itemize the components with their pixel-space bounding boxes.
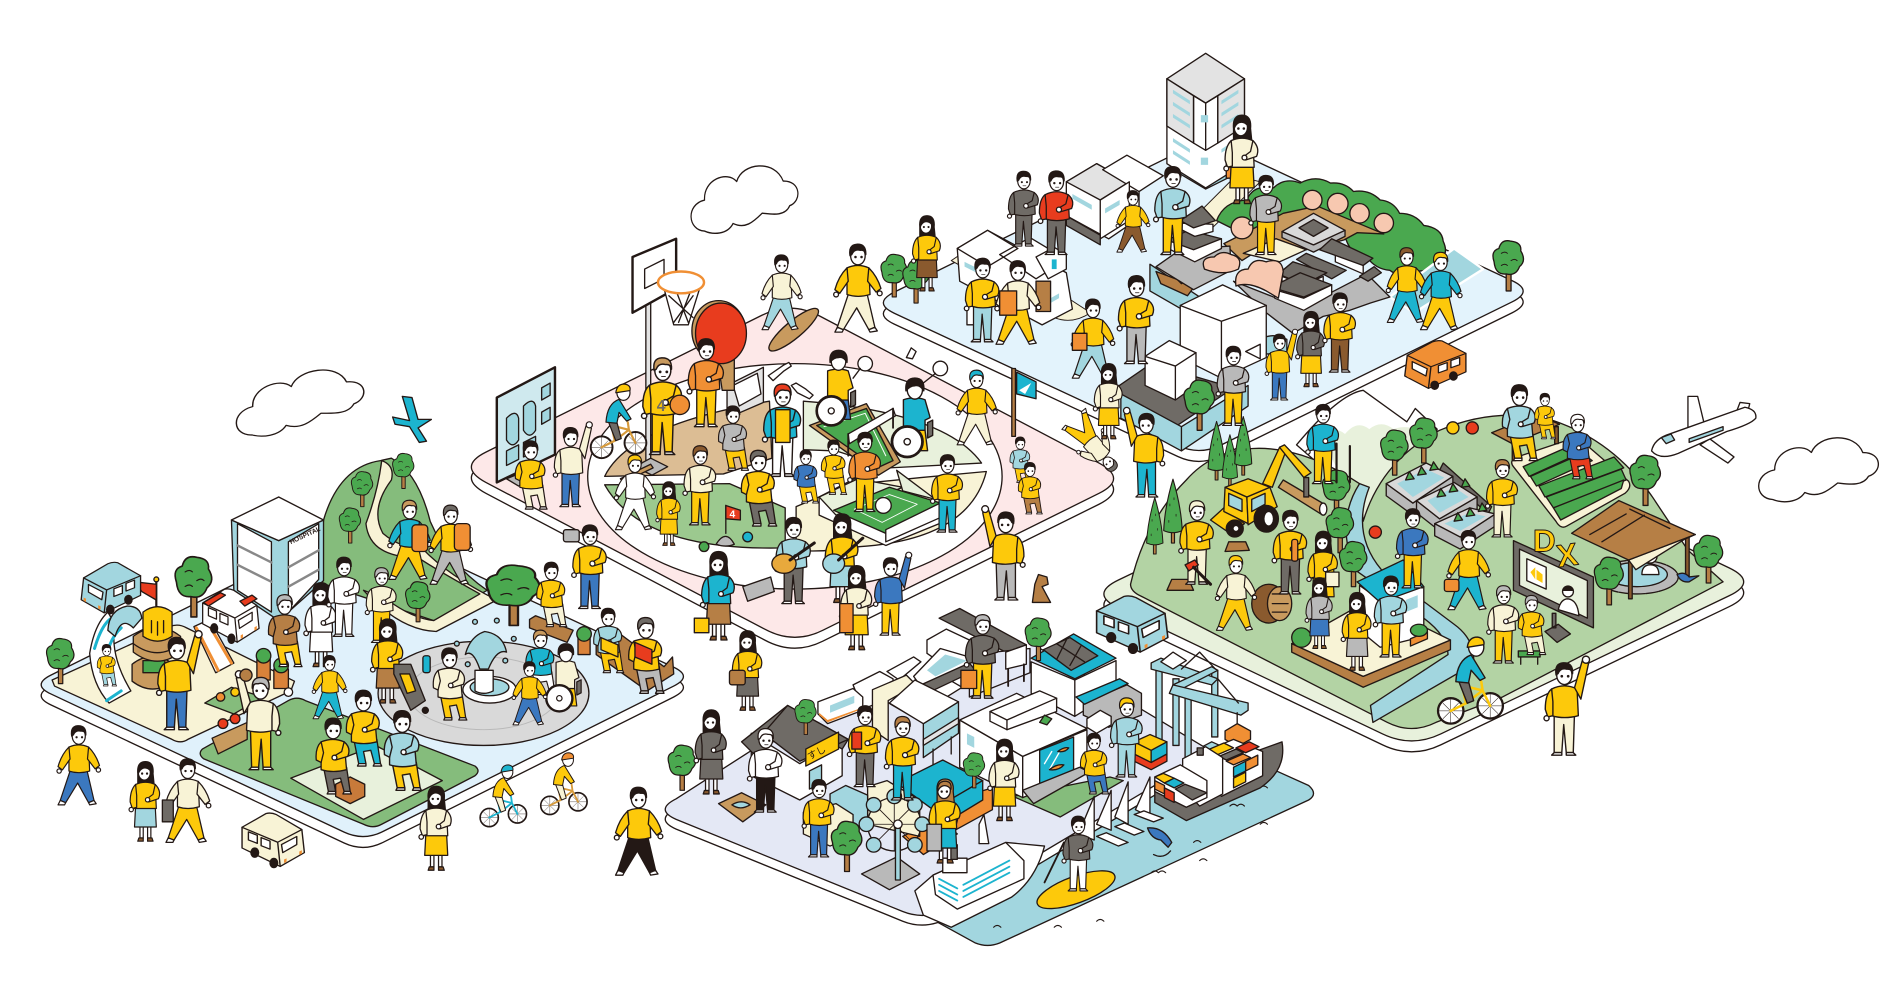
person: yellow jumper walking	[834, 244, 882, 332]
person: grandfather with glove	[235, 669, 281, 770]
teal warehouse and orange racks	[868, 760, 992, 855]
planter: right	[577, 627, 591, 655]
cloud: right	[1753, 432, 1882, 505]
people: sports and culture platform	[515, 216, 1165, 710]
stand up paddle board	[1033, 863, 1119, 916]
icon: soccer ball	[875, 498, 891, 513]
person: elderly man	[1487, 586, 1519, 663]
icon: rackets	[853, 356, 948, 383]
hot spring	[1596, 550, 1678, 594]
person: guide	[1117, 276, 1154, 364]
bench: readers	[596, 628, 674, 691]
person: reader with red book	[629, 618, 664, 693]
person: woman walking	[729, 631, 762, 710]
planters	[1386, 462, 1495, 549]
platform top: right	[1104, 435, 1744, 741]
person: kid on slide	[97, 644, 117, 686]
icon: yellow excavator	[1211, 445, 1327, 537]
icon: stroller	[394, 664, 428, 718]
waves	[994, 786, 1267, 927]
icon: wooden barrel	[1252, 584, 1292, 623]
person: man in blue pointing	[1395, 509, 1428, 588]
sailboats	[1078, 777, 1163, 846]
trees: park	[47, 557, 540, 684]
icon: amp speaker	[743, 577, 774, 601]
person: boy running with glove	[312, 655, 347, 719]
tree stumps	[1167, 542, 1249, 590]
people: city platform	[964, 115, 1462, 425]
person: man with baby	[1373, 576, 1407, 657]
sea	[903, 742, 1314, 945]
person: sitting woman 2	[1018, 462, 1042, 514]
person: phone woman	[694, 552, 734, 640]
container ship	[1155, 739, 1283, 821]
people: park platform	[97, 500, 664, 794]
castle walls and keeps: main	[1234, 239, 1390, 333]
pine trees	[1147, 417, 1252, 554]
person: model kit fan	[515, 441, 547, 509]
person: doctor	[304, 583, 336, 667]
person: hiker	[388, 500, 431, 579]
person: woman with orange bag	[1224, 115, 1258, 204]
picnic blanket	[291, 745, 442, 819]
person: woman with tote	[927, 779, 960, 863]
person: woman with notepad	[1296, 311, 1324, 387]
person: bench child	[1535, 393, 1556, 439]
icon: tree	[1184, 380, 1214, 430]
person: hiker with backpack	[429, 505, 473, 584]
person: clown	[762, 384, 801, 476]
platform base: park	[41, 537, 683, 847]
trees: hill	[339, 453, 430, 622]
person: model kit builder	[553, 422, 592, 507]
person: man with satchel	[1154, 167, 1190, 255]
person: parent	[370, 619, 403, 703]
person: picnic man	[384, 711, 421, 790]
stone plaza	[378, 641, 589, 745]
text: DX letters: X	[1554, 536, 1580, 574]
person: woman in skirt	[419, 786, 451, 870]
icon: airplane	[1652, 396, 1756, 463]
golf flag	[699, 505, 752, 552]
flag	[135, 577, 159, 606]
person: megaphone man	[1216, 344, 1260, 425]
person: woman in cream	[988, 739, 1019, 821]
person: yellow woman with bag	[1444, 531, 1490, 610]
icon: blue van	[81, 562, 141, 614]
person: waving man teal pants	[1124, 407, 1165, 497]
person: seated teal	[526, 630, 556, 695]
screen: DX telemedicine	[1513, 541, 1593, 642]
icon: giant table tennis paddle	[692, 301, 746, 390]
cherry trees	[1231, 190, 1393, 239]
icon: cream van	[242, 813, 304, 868]
icon: plastic model sprue	[497, 367, 555, 486]
person: videographer	[719, 406, 749, 470]
person: shopper with bag	[964, 258, 999, 342]
mountain: hiking hill	[317, 458, 487, 621]
lawn	[200, 698, 478, 827]
icon: teal dragonfly drone	[393, 396, 431, 442]
crane	[1151, 652, 1251, 760]
icon: tree	[1493, 241, 1523, 291]
sector: cream	[796, 472, 986, 551]
road: cream street	[951, 176, 1260, 320]
person: sitting woman	[1010, 437, 1031, 482]
shops row: front	[957, 230, 1072, 325]
playground tower and slides	[90, 606, 234, 703]
tea terraces	[1512, 438, 1630, 527]
platform base: centre	[471, 319, 1114, 648]
bench: cup woman	[530, 616, 573, 642]
panel: city platform	[881, 53, 1523, 461]
icon: tree	[881, 254, 907, 297]
person: photographer	[1306, 405, 1338, 484]
platform top: port	[665, 606, 1212, 915]
icon: bowling pins and shuttlecock	[768, 348, 916, 399]
person: walker	[57, 726, 101, 805]
moored boat	[1156, 264, 1195, 296]
mountain: white snow peak	[1297, 390, 1437, 509]
sushi shop: すし	[805, 743, 828, 763]
person: seated ground golf	[741, 450, 777, 526]
icon: baseball	[284, 688, 293, 696]
icon: basketball hoop	[633, 239, 704, 475]
picnic basket	[336, 777, 365, 804]
person: man with bottle	[1272, 510, 1307, 594]
person: tourist with camera	[1419, 252, 1462, 330]
icon: ambulance	[203, 589, 259, 643]
solar building	[1031, 634, 1141, 733]
person: picnic girl	[346, 690, 382, 766]
castle grounds	[1224, 206, 1384, 262]
person: sushi chef	[747, 729, 782, 812]
person: camera man	[563, 525, 606, 608]
person: woman with apron	[694, 710, 726, 794]
person: basketball player	[641, 358, 689, 455]
sector: green	[605, 484, 785, 548]
trees: port	[668, 618, 1051, 872]
train and station	[818, 608, 1030, 724]
person: dog walker	[982, 506, 1025, 600]
platform base: port	[665, 616, 1212, 925]
icon: tree	[903, 260, 929, 303]
person: waving woman	[1544, 656, 1590, 755]
person: jogger in cap	[956, 370, 997, 445]
person: table tennis player	[687, 339, 723, 427]
castle keep: left	[1156, 206, 1231, 290]
court: table tennis	[809, 404, 900, 475]
person: hoodie	[931, 455, 963, 532]
person: seated woman with cup	[537, 562, 567, 627]
person: baseball batter	[614, 455, 656, 530]
person: man in blue	[874, 552, 912, 635]
ferris wheel	[859, 789, 929, 890]
person: woman at fountain	[512, 662, 547, 725]
shops row: back	[1066, 155, 1163, 245]
hut roof and posts	[1572, 501, 1695, 599]
panel: nature and rural platform	[1097, 390, 1744, 752]
person: woman with bags	[129, 762, 160, 841]
golf flag: 4	[729, 510, 735, 521]
stone monument	[1282, 213, 1345, 252]
person: soccer player	[848, 432, 880, 512]
sushi shop	[742, 705, 848, 800]
person: backpacker	[884, 716, 919, 800]
person: dock worker	[1109, 698, 1142, 777]
people: port platform	[694, 615, 1142, 891]
person: wheelchair user	[546, 644, 581, 711]
person: woman	[1071, 299, 1115, 378]
person: softball girl	[656, 482, 680, 545]
icon: orange car	[1405, 341, 1466, 389]
white bite behind station	[788, 594, 1030, 727]
person: breakdancer	[1058, 408, 1129, 482]
fountain	[454, 618, 516, 703]
person: picnic woman	[316, 718, 351, 794]
stream	[1346, 484, 1474, 722]
container stack	[1134, 735, 1167, 770]
house on cream plot	[1292, 560, 1450, 687]
person: golfer	[683, 446, 716, 525]
leaping fish	[1148, 828, 1172, 856]
moats	[1150, 248, 1483, 313]
person: tourist with bun	[1386, 248, 1427, 322]
cherry blossoms: large	[1203, 253, 1283, 298]
castle bushes	[1217, 179, 1446, 275]
fish crate	[719, 793, 766, 822]
person: guitarist woman	[823, 514, 863, 602]
icon: bus	[1097, 596, 1168, 653]
person: shopper	[1116, 191, 1150, 252]
terminal building	[872, 675, 958, 766]
person: woman spectator	[821, 440, 847, 495]
person: kid pointing	[1265, 329, 1298, 400]
person: phone viewer	[794, 450, 819, 503]
white stage block and paddle handle	[727, 367, 763, 418]
person: man with bags	[162, 759, 211, 842]
person: old man with cane	[268, 595, 302, 667]
platform top: city	[883, 143, 1523, 450]
person: cyclist	[591, 384, 646, 458]
person: woman by trees	[912, 216, 940, 291]
bench	[1492, 415, 1560, 461]
platform top: park	[41, 526, 683, 837]
person: woman yellow	[1341, 592, 1371, 670]
person: man in suit	[961, 615, 999, 698]
hospital building: HOSPITAL	[289, 526, 322, 546]
person: medical staff	[327, 557, 359, 636]
cloud: centre	[684, 160, 802, 237]
person: woman with satchel	[1307, 531, 1339, 611]
flower beds and planters	[205, 648, 288, 754]
person: bench man	[1502, 385, 1538, 461]
text: DX letters	[1533, 523, 1580, 574]
playground ground	[52, 625, 294, 742]
person: wheelchair badminton	[817, 350, 855, 425]
people: walkers outside platforms	[57, 726, 663, 875]
white blocks and dark base	[1112, 285, 1287, 451]
path: cream trail	[364, 461, 497, 632]
flowers	[1369, 422, 1478, 538]
hills: green ground	[1131, 415, 1723, 728]
cruise ship	[915, 815, 1045, 927]
person: reader on bench	[594, 608, 624, 673]
platform base: city	[883, 154, 1523, 461]
icon: flagpole	[1012, 368, 1036, 436]
person: child on bike	[480, 765, 526, 827]
stadium: soccer mini	[819, 470, 945, 545]
person: elderly woman	[1518, 595, 1546, 664]
icon: dog	[1032, 575, 1051, 602]
sector: tan	[605, 401, 772, 476]
person: man with red book	[847, 706, 881, 787]
person: barrel roller	[1215, 556, 1257, 630]
person: paddle boarder	[1045, 816, 1093, 891]
person: red samurai	[1038, 171, 1073, 255]
person: man with phone	[1249, 175, 1282, 255]
person: boy at aquarium	[1080, 733, 1109, 794]
person: runner in hoodie	[614, 787, 663, 875]
person: man with clipboard	[1323, 293, 1355, 372]
platform top: centre	[471, 308, 1114, 637]
person: cyclist on stream path	[1438, 637, 1503, 724]
aquarium block	[960, 691, 1123, 817]
text: DX letters: D	[1533, 523, 1556, 559]
panel: sports and culture platform	[471, 239, 1114, 648]
trees: right platform	[1322, 418, 1723, 605]
hospital building	[231, 497, 324, 621]
person: skateboarder	[761, 255, 823, 356]
person: lumberjack	[1179, 501, 1213, 584]
icon: photographer poles	[1337, 444, 1350, 482]
person: orange bag woman	[839, 566, 872, 650]
person: woman in cream	[1093, 364, 1122, 439]
tower	[1167, 53, 1244, 189]
circular plaza ring	[588, 364, 1002, 589]
people: rural platform	[1179, 385, 1593, 755]
person: child on bike 2	[541, 753, 587, 815]
person: man at fountain	[423, 648, 467, 720]
icon: bird	[1677, 573, 1699, 582]
person: farmer with hat	[1485, 460, 1517, 537]
cloud: left	[229, 362, 369, 442]
person: man from behind	[802, 780, 834, 857]
person: basketball player: 4	[657, 398, 666, 415]
person: tea farmer	[1563, 414, 1593, 479]
person: shopper with orange bag	[995, 261, 1041, 344]
person: samurai lord	[1007, 171, 1038, 246]
sector: pale green	[803, 401, 982, 468]
person: guitarist	[772, 517, 814, 604]
platform base: right	[1104, 446, 1744, 752]
person: school girl	[1305, 578, 1332, 648]
panel: park platform	[41, 453, 683, 847]
person: wheelchair badminton 2	[892, 378, 933, 457]
person: old woman	[365, 568, 396, 642]
small vans at terminal	[803, 785, 868, 846]
person: father at slide	[157, 631, 202, 730]
panel: port platform	[665, 594, 1314, 945]
